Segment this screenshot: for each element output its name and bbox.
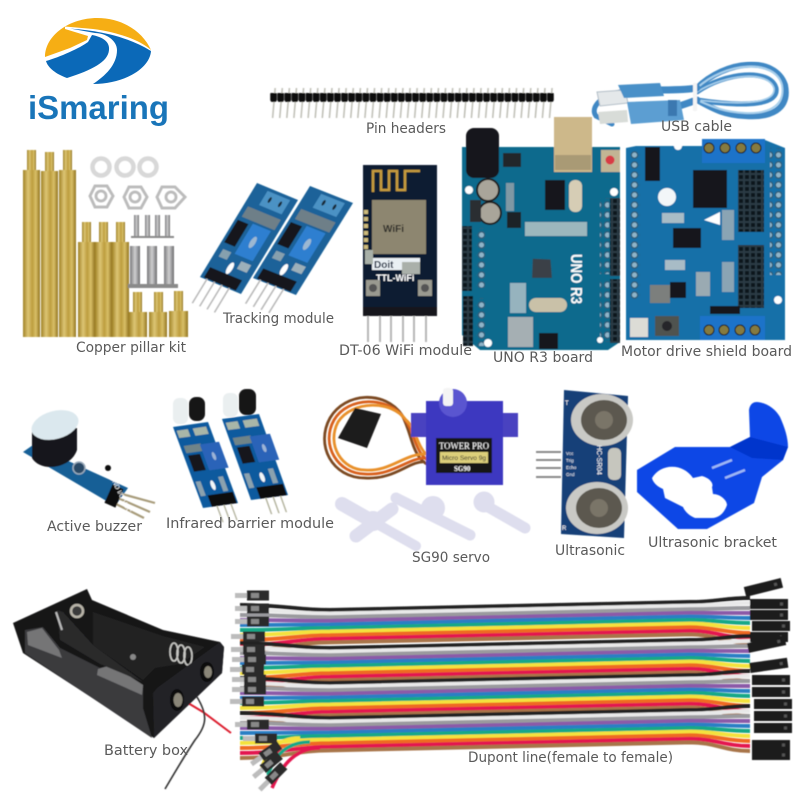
left headers	[462, 226, 485, 346]
transmitter	[571, 394, 633, 446]
right connectors	[744, 578, 792, 760]
copper pillar kit	[23, 150, 188, 337]
receiver	[566, 482, 628, 534]
servo body: Micro Servo 9g	[442, 455, 486, 462]
microcontroller	[523, 250, 560, 288]
infrared barrier modules	[173, 389, 298, 524]
servo body: TOWER PRO	[439, 441, 489, 451]
active buzzer: GND I/O VCC	[108, 475, 132, 515]
capacitors	[477, 179, 501, 224]
DC jack	[466, 128, 499, 178]
label: pin headers: Pin headers	[366, 121, 446, 137]
top terminal	[702, 139, 765, 163]
side wall highlights	[27, 628, 143, 695]
ultrasonic sensor: R	[562, 526, 567, 532]
USB cable	[594, 65, 786, 124]
ultrasonic sensor	[536, 390, 633, 538]
cavity floor	[93, 612, 205, 680]
logo circle	[658, 188, 676, 206]
label: dupont line: Dupont line(female to female)	[468, 750, 673, 766]
label: UNO R3 board: UNO R3 board	[493, 350, 593, 366]
label: SG90 servo: SG90 servo	[412, 550, 490, 566]
label: ultrasonic bracket: Ultrasonic bracket	[648, 535, 778, 551]
label: battery box: Battery box	[104, 743, 188, 759]
medium brass pillars	[78, 222, 129, 337]
ultrasonic sensor: HC-SR04	[595, 445, 602, 475]
servo body	[411, 388, 518, 485]
label: motor drive shield board: Motor drive shield board	[621, 344, 792, 360]
ultrasonic sensor: Gnd	[566, 472, 575, 477]
servo horns	[342, 496, 525, 546]
label: tracking module: Tracking module	[222, 311, 334, 327]
logo wordmark: iSmaring	[28, 89, 169, 126]
wire ribbons	[240, 598, 750, 758]
ultrasonic sensor: T	[565, 401, 569, 407]
small screws	[131, 215, 174, 238]
wires	[165, 697, 231, 789]
white connector and button	[630, 316, 679, 337]
servo body: SG90	[454, 465, 471, 473]
label: DT-06 WiFi module: DT-06 WiFi module	[339, 343, 472, 359]
servo plug	[338, 408, 381, 448]
contacts and springs	[56, 605, 192, 665]
board text: UNO R3	[567, 254, 584, 304]
dupont jumper wires	[230, 578, 792, 793]
label: infrared barrier module: Infrared barrier module	[166, 516, 334, 532]
big IC	[693, 170, 727, 208]
side wall	[25, 627, 152, 738]
right pads	[770, 148, 782, 210]
right headers	[600, 198, 620, 343]
SG90 servo	[324, 388, 525, 546]
pin headers	[270, 88, 554, 118]
fan-out wires	[262, 738, 320, 788]
active buzzer	[23, 405, 155, 518]
reset button	[601, 150, 620, 172]
ultrasonic sensor: Vcc	[566, 451, 574, 456]
battery box	[13, 589, 231, 789]
ultrasonic sensor: Trig	[566, 458, 574, 463]
dark header blocks	[738, 170, 764, 308]
IC	[545, 180, 565, 210]
ultrasonic bracket	[637, 402, 788, 529]
servo cable	[324, 397, 440, 478]
tracking modules	[186, 183, 353, 318]
label: active buzzer: Active buzzer	[47, 519, 142, 535]
label: copper pillar kit: Copper pillar kit	[76, 340, 186, 356]
hex nuts	[90, 186, 185, 208]
label: ultrasonic: Ultrasonic	[555, 543, 625, 559]
DT-06 WiFi module: Doit	[374, 260, 394, 271]
long screws	[128, 246, 178, 288]
grey pads	[508, 317, 533, 347]
left connectors	[230, 590, 287, 793]
bottom terminal	[700, 316, 765, 340]
tall brass pillars	[23, 150, 76, 337]
label: USB cable: USB cable	[661, 119, 732, 135]
motor drive shield board	[626, 139, 785, 340]
logo emblem: road ellipse	[45, 18, 151, 84]
IR LEDs module 1	[173, 397, 205, 424]
logo: iSmaring	[28, 18, 169, 126]
UNO R3 board	[462, 117, 620, 350]
short brass pillars	[129, 291, 188, 337]
DT-06 WiFi module: WiFi	[383, 224, 404, 235]
main crystal	[529, 298, 567, 312]
DT-06 WiFi module: TTL-WiFi	[376, 273, 414, 283]
washers	[92, 158, 156, 176]
end plate	[153, 642, 224, 738]
IR LEDs module 2	[223, 389, 256, 417]
DT-06 WiFi module	[363, 165, 437, 342]
USB socket	[554, 117, 592, 172]
ultrasonic sensor: Echo	[566, 465, 577, 470]
